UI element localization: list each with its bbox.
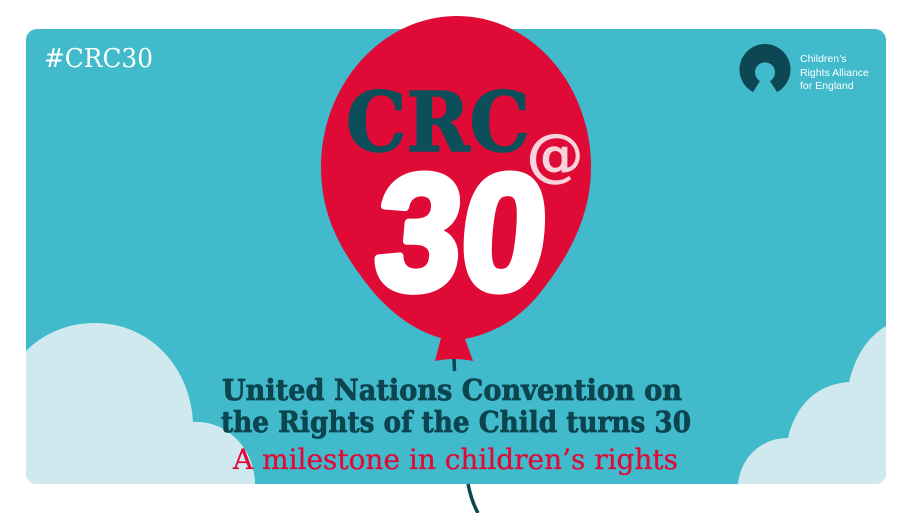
balloon title: 30: 30 <box>369 140 555 324</box>
balloon title: CRC: CRC <box>346 75 530 171</box>
balloon string: upper <box>452 358 456 371</box>
heading: line two: the Rights of the Child turns 30 <box>221 405 691 439</box>
balloon title: at sign: @ <box>527 123 583 188</box>
heading: line one: United Nations Convention on <box>222 373 682 407</box>
logo text: Children’s <box>800 53 846 65</box>
balloon <box>321 16 591 361</box>
hashtag: #CRC30 <box>44 44 153 74</box>
cloud: bottom right <box>738 326 886 484</box>
icon: keyhole ring <box>740 44 791 92</box>
logo text: Rights Alliance <box>800 67 869 79</box>
subheading: A milestone in children’s rights <box>232 443 678 476</box>
logo: Children's Rights Alliance for England <box>740 44 869 92</box>
balloon string: lower <box>468 484 478 513</box>
cloud: bottom left <box>26 323 255 484</box>
logo text: for England <box>800 80 854 92</box>
